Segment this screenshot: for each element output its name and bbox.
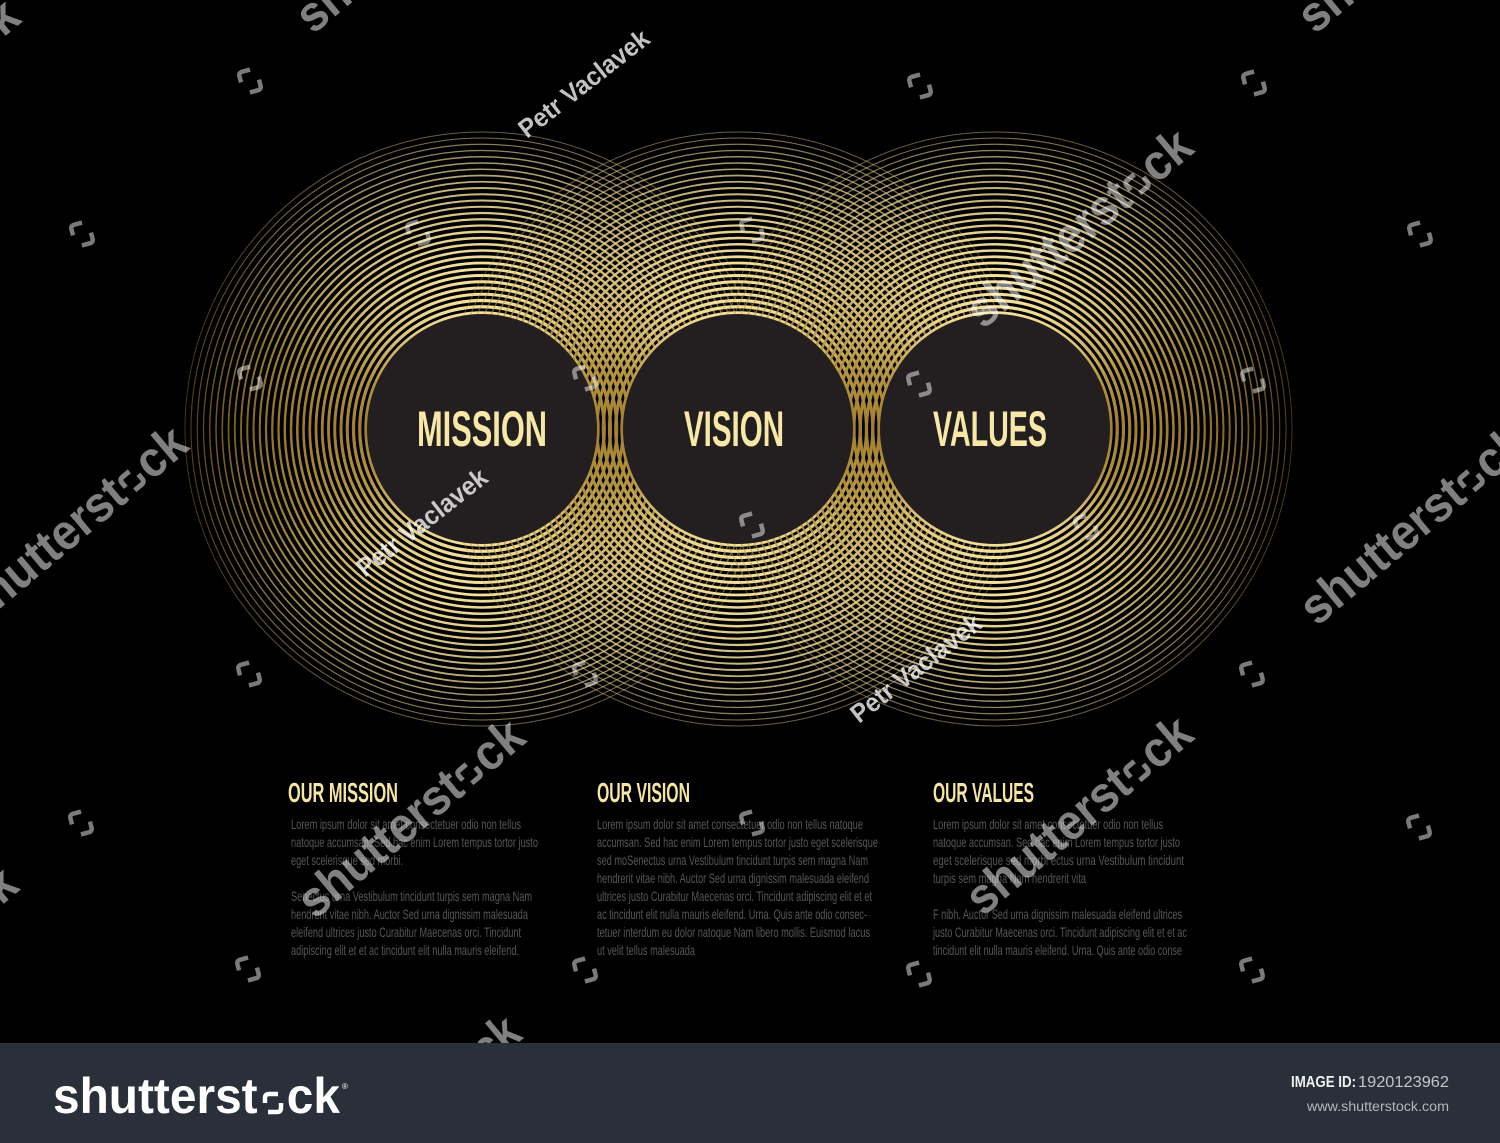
watermark: small bracket icons (69, 70, 1432, 985)
body: our values (932, 816, 1187, 958)
body: our vision: tetuer interdum eu dolor natoque Nam libero mollis. Euismod lacus (597, 924, 870, 940)
watermark: author name (350, 23, 988, 729)
body: our mission: natoque accumsan. Sed hac enim Lorem tempus tortor justo (291, 834, 538, 850)
body: our values: turpis sem magna Nam hendrerit vita (933, 870, 1086, 886)
label: vision: VISION (684, 401, 784, 457)
body: our vision: ut velit tellus malesuada (597, 942, 695, 958)
body: our mission: Senectus urna Vestibulum tincidunt turpis sem magna Nam (291, 888, 532, 904)
body: our mission: Lorem ipsum dolor sit amet consectetuer odio non tellus (291, 816, 521, 832)
footer logo: shutterstock: ® (342, 1082, 348, 1091)
body: our mission: eget scelerisque sed morbi. (291, 852, 403, 868)
watermark: shutterstock wordmarks: shutterstock (954, 704, 1203, 925)
chart: three overlapping gold concentric ring circles (185, 132, 1292, 726)
footer: image id (1291, 1074, 1449, 1091)
body: our vision: accumsan. Sed hac enim Lorem tempus tortor justo eget scelerisque (597, 834, 878, 850)
heading: our values: OUR VALUES (933, 777, 1034, 808)
body: our values: Lorem ipsum dolor sit amet consectetuer odio non tellus (933, 816, 1163, 832)
heading: our mission: OUR MISSION (288, 777, 398, 808)
body: our mission: hendrerit vitae nibh. Auctor Sed urna dignissim malesuada (291, 906, 528, 922)
heading: our vision: OUR VISION (597, 777, 690, 808)
footer: image id: IMAGE ID: (1291, 1074, 1356, 1091)
body: our vision: ac tincidunt elit nulla mauris eleifend. Urna. Quis ante odio consec- (597, 906, 867, 922)
footer bar (0, 1043, 1500, 1143)
text block: our vision (597, 777, 878, 958)
circle: values (880, 314, 1110, 544)
body: our values: F nibh. Auctor Sed urna dignissim malesuada eleifend ultrices (933, 906, 1182, 922)
body: our values: justo Curabitur Maecenas orci. Tincidunt adipiscing elit et et ac (932, 924, 1187, 940)
watermark: author name: Petr Vaclavek (350, 462, 494, 583)
body: our values: tincidunt elit nulla mauris eleifend. Urna. Quis ante odio conse (933, 942, 1182, 958)
text block: our mission (288, 777, 538, 958)
text block: our values (932, 777, 1187, 958)
label: mission: MISSION (417, 401, 547, 457)
label: values: VALUES (933, 401, 1047, 457)
body: our mission: adipiscing elit et et ac tincidunt elit nulla mauris eleifend. (291, 942, 519, 958)
footer: site url: www.shutterstock.com (1306, 1099, 1449, 1114)
watermark: shutterstock wordmarks: shutterstock (954, 117, 1203, 338)
body: our vision: ultrices justo Curabitur Maecenas orci. Tincidunt adipiscing elit et et (597, 888, 872, 904)
watermark: author name: Petr Vaclavek (844, 608, 988, 729)
watermark: shutterstock wordmarks: shutterstock (286, 707, 535, 928)
body: our vision: Lorem ipsum dolor sit amet consectetuer odio non tellus natoque (597, 816, 863, 832)
body: our mission (291, 816, 538, 958)
footer logo: shutterstock: shutterstock (53, 1068, 340, 1124)
body: our vision: hendrerit vitae nibh. Auctor Sed urna dignissim malesuada eleifend (597, 870, 869, 886)
body: our vision: sed moSenectus urna Vestibulum tincidunt turpis sem magna Nam (597, 852, 868, 868)
circle: vision (623, 314, 853, 544)
body: our vision (597, 816, 878, 958)
watermark: shutterstock wordmarks: ck (459, 1003, 531, 1076)
watermark: author name: Petr Vaclavek (512, 23, 656, 144)
body: our values: eget scelerisque sed morbi ectus urna Vestibulum tincidunt (933, 852, 1184, 868)
footer: image id: 1920123962 (1358, 1074, 1449, 1091)
circle: mission (367, 314, 597, 544)
body: our mission: eleifend ultrices justo Curabitur Maecenas orci. Tincidunt (291, 924, 521, 940)
body: our values: natoque accumsan. Sed hac enim Lorem tempus tortor justo (933, 834, 1180, 850)
